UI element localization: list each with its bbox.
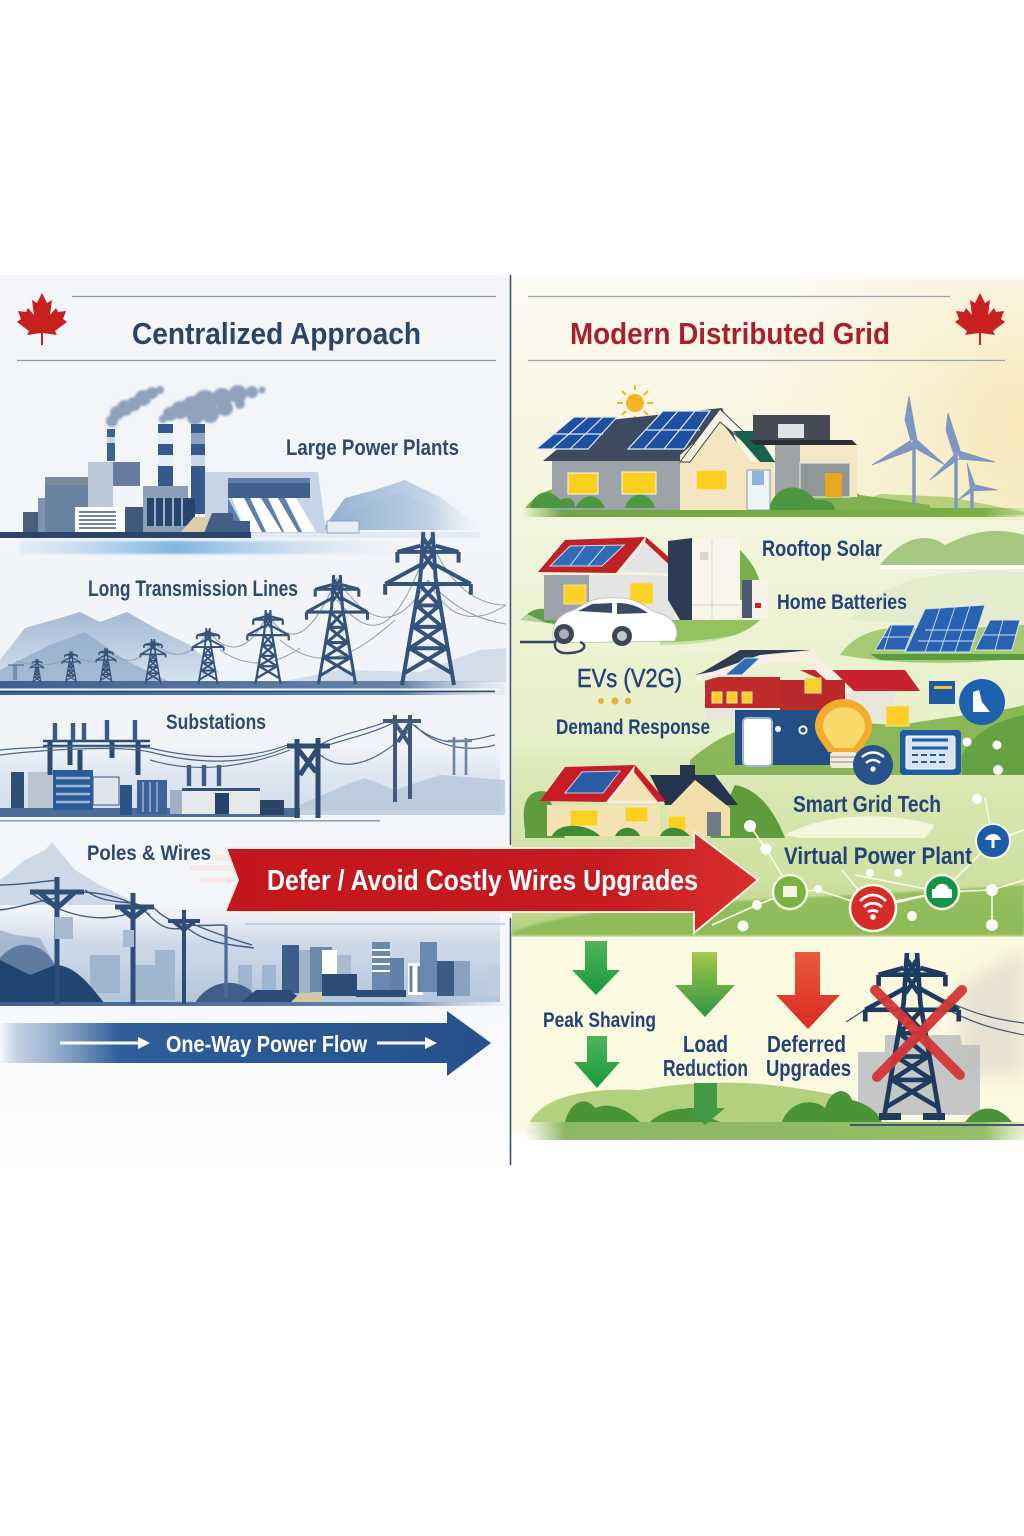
arrow: one-way power flow <box>0 1011 491 1076</box>
label: substations: Substations <box>166 711 266 734</box>
label: virtual power plant: Virtual Power Plant <box>784 843 972 870</box>
illustration: home with battery and EV <box>520 531 1024 663</box>
heading: modern distributed grid: Modern Distributed Grid <box>570 316 890 351</box>
illustration: poles and wires <box>0 842 505 1006</box>
icon: chimneys <box>107 424 205 514</box>
panel: centralized approach <box>0 275 510 1165</box>
icon: smoke <box>106 385 266 427</box>
icon: folder and gauge <box>929 679 1005 725</box>
illustration: large power plants <box>0 385 480 554</box>
label: demand response: Demand Response <box>556 716 710 739</box>
icon: green lock node <box>925 875 959 909</box>
label: deferred upgrades: Upgrades <box>766 1055 851 1081</box>
illustration: substations <box>0 711 505 822</box>
illustration: house and smart grid network <box>512 765 1024 936</box>
label: peak shaving: Peak Shaving <box>543 1009 656 1032</box>
label: deferred upgrades: Deferred <box>767 1031 846 1057</box>
arrow: peak shaving upper <box>572 941 620 995</box>
arrow: one-way power flow: One-Way Power Flow <box>166 1031 367 1057</box>
illustration: demand response <box>556 650 1024 785</box>
arrow: load reduction lower <box>685 1083 725 1125</box>
icon: cancelled transmission tower <box>846 953 1024 1120</box>
icon: wifi <box>853 745 893 785</box>
label: load reduction: Load <box>683 1031 728 1057</box>
label: home batteries: Home Batteries <box>777 591 907 614</box>
icon: bushes <box>530 1083 1012 1122</box>
icon: suburban house <box>524 765 785 838</box>
arrow: defer or avoid costly wires upgrades: Defer / Avoid Costly Wires Upgrades <box>267 865 698 897</box>
icon: solar array <box>840 605 1024 663</box>
illustration: long transmission lines <box>0 532 506 695</box>
arrow: defer or avoid costly wires upgrades <box>190 832 758 933</box>
illustration: solar homes and wind turbines <box>522 385 1024 517</box>
icon: sun <box>617 385 653 420</box>
icon: red wifi node <box>850 885 896 931</box>
label: rooftop solar: Rooftop Solar <box>762 536 882 561</box>
label: poles and wires: Poles & Wires <box>87 842 211 865</box>
icon: light bulb <box>815 699 872 768</box>
icon: wind turbines <box>872 396 998 510</box>
icon: electric car <box>520 598 677 653</box>
label: long transmission lines: Long Transmission Lines <box>88 576 298 601</box>
icon: hydro dam <box>205 472 359 533</box>
label: large power plants: Large Power Plants <box>286 435 459 460</box>
panel: outcomes <box>512 937 1024 1140</box>
arrow: deferred upgrades <box>776 952 840 1029</box>
arrow: peak shaving lower <box>574 1036 620 1088</box>
heading: modern distributed grid <box>528 293 1005 360</box>
label: load reduction: Reduction <box>663 1055 748 1081</box>
icon: blue tree node <box>976 824 1010 858</box>
icon: solar panels on roof <box>536 411 710 449</box>
icon: control panel <box>900 730 961 775</box>
icon: network nodes <box>738 765 1003 932</box>
arrow: load reduction upper <box>675 952 735 1017</box>
heading: centralized approach: Centralized Approach <box>132 316 421 351</box>
icon: home battery <box>668 538 768 620</box>
icon: green mail node <box>773 875 807 909</box>
icon: network lines <box>712 798 1024 925</box>
panel: modern distributed grid <box>512 275 1024 1165</box>
label: smart grid tech: Smart Grid Tech <box>793 791 941 817</box>
icon: dashboard with phone <box>735 710 840 766</box>
icon: power plant buildings <box>0 462 251 538</box>
icon: three dots <box>598 697 631 705</box>
label: EVs (V2G): EVs (V2G) <box>577 663 682 693</box>
heading: centralized approach <box>17 293 496 360</box>
